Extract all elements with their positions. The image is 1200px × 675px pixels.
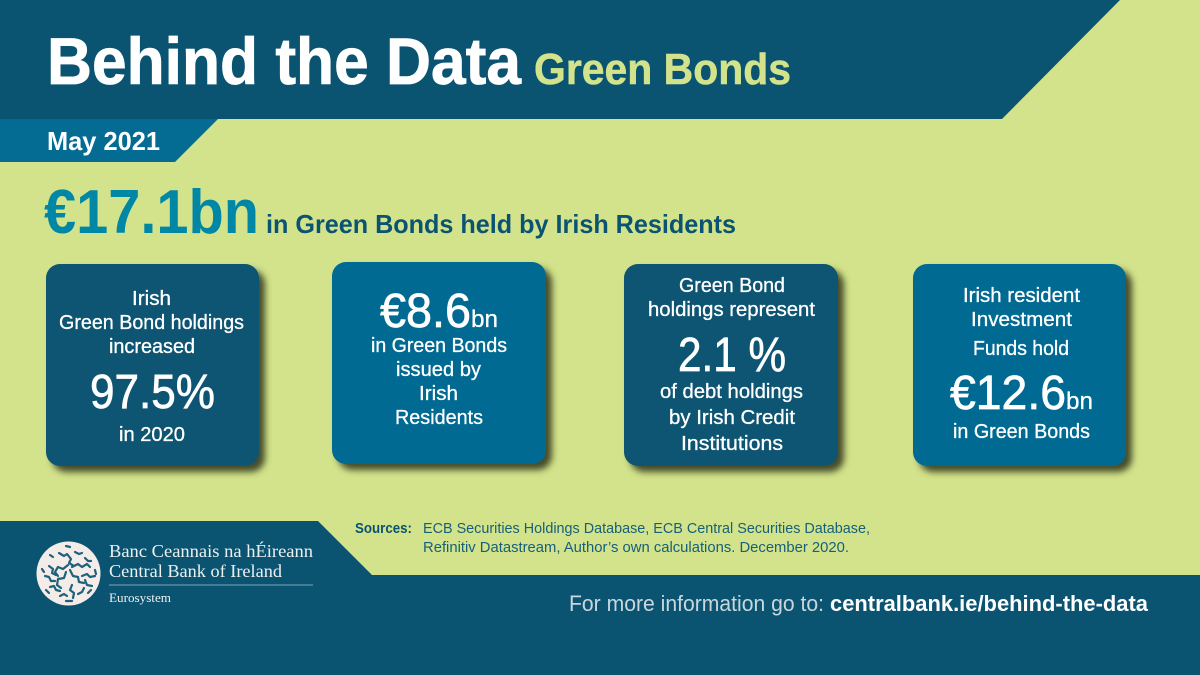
header banner [0, 0, 1120, 119]
figure: 12.6bn: €12.6 [950, 367, 1066, 420]
subtitle: Green Bonds [534, 45, 791, 94]
panel: holdings increased: increased [109, 336, 195, 358]
footer band [0, 521, 1200, 675]
panel: holdings increased [46, 264, 259, 466]
logo wordmark: Banc Ceannais na hÉireann [109, 540, 313, 561]
logo wordmark: Eurosystem [109, 591, 171, 605]
call to action: For more information go to: [569, 591, 824, 616]
panel: investment funds [913, 264, 1126, 466]
figure: 2.1%: 2.1 % [678, 329, 786, 382]
figure: 8.6bn: €8.6 [380, 285, 471, 338]
panel: issued by Irish residents: issued by [396, 359, 481, 381]
panel: investment funds: bn [1066, 388, 1093, 415]
figure: 97.5%: 97.5% [90, 366, 215, 419]
panel: holdings increased: in 2020 [119, 424, 185, 446]
icon: central bank seal [36, 542, 100, 606]
panel: issued by Irish residents [332, 262, 546, 464]
date banner: May 2021 [47, 126, 160, 156]
panel: issued by Irish residents: Residents [395, 407, 483, 429]
panel: holdings increased: Irish [132, 288, 171, 310]
panel: issued by Irish residents: in Green Bonds [371, 335, 507, 357]
title: Behind the Data [47, 24, 522, 98]
panel: credit institutions share: holdings represent [648, 299, 815, 321]
panel: holdings increased: Green Bond holdings [59, 312, 244, 334]
panel: credit institutions share: by Irish Credit [669, 407, 795, 429]
panel: credit institutions share: Green Bond [679, 275, 785, 297]
sources: Sources: [355, 520, 412, 537]
date banner [0, 119, 218, 162]
sources: Refinitiv Datastream, Author’s own calculations. December 2020. [423, 539, 849, 556]
sources: ECB Securities Holdings Database, ECB Central Securities Database, [423, 520, 870, 537]
headline figure: €17.1bn [44, 178, 259, 247]
headline text: in Green Bonds held by Irish Residents [266, 209, 736, 239]
panel: credit institutions share [624, 264, 838, 466]
panel: credit institutions share: of debt holdings [660, 381, 803, 403]
panel: credit institutions share: Institutions [681, 433, 783, 455]
logo wordmark: Central Bank of Ireland [109, 561, 282, 581]
panel: investment funds: Funds hold [973, 338, 1069, 360]
panel: investment funds: Irish resident [963, 285, 1080, 307]
call to action [569, 591, 1149, 616]
call to action: centralbank.ie/behind-the-data [830, 591, 1149, 616]
logo wordmark [109, 540, 313, 605]
panel: investment funds: in Green Bonds [953, 421, 1090, 443]
panel: issued by Irish residents: Irish [419, 383, 458, 405]
panel: investment funds: Investment [971, 309, 1072, 331]
panel: issued by Irish residents: bn [471, 306, 498, 333]
sources [355, 520, 870, 556]
